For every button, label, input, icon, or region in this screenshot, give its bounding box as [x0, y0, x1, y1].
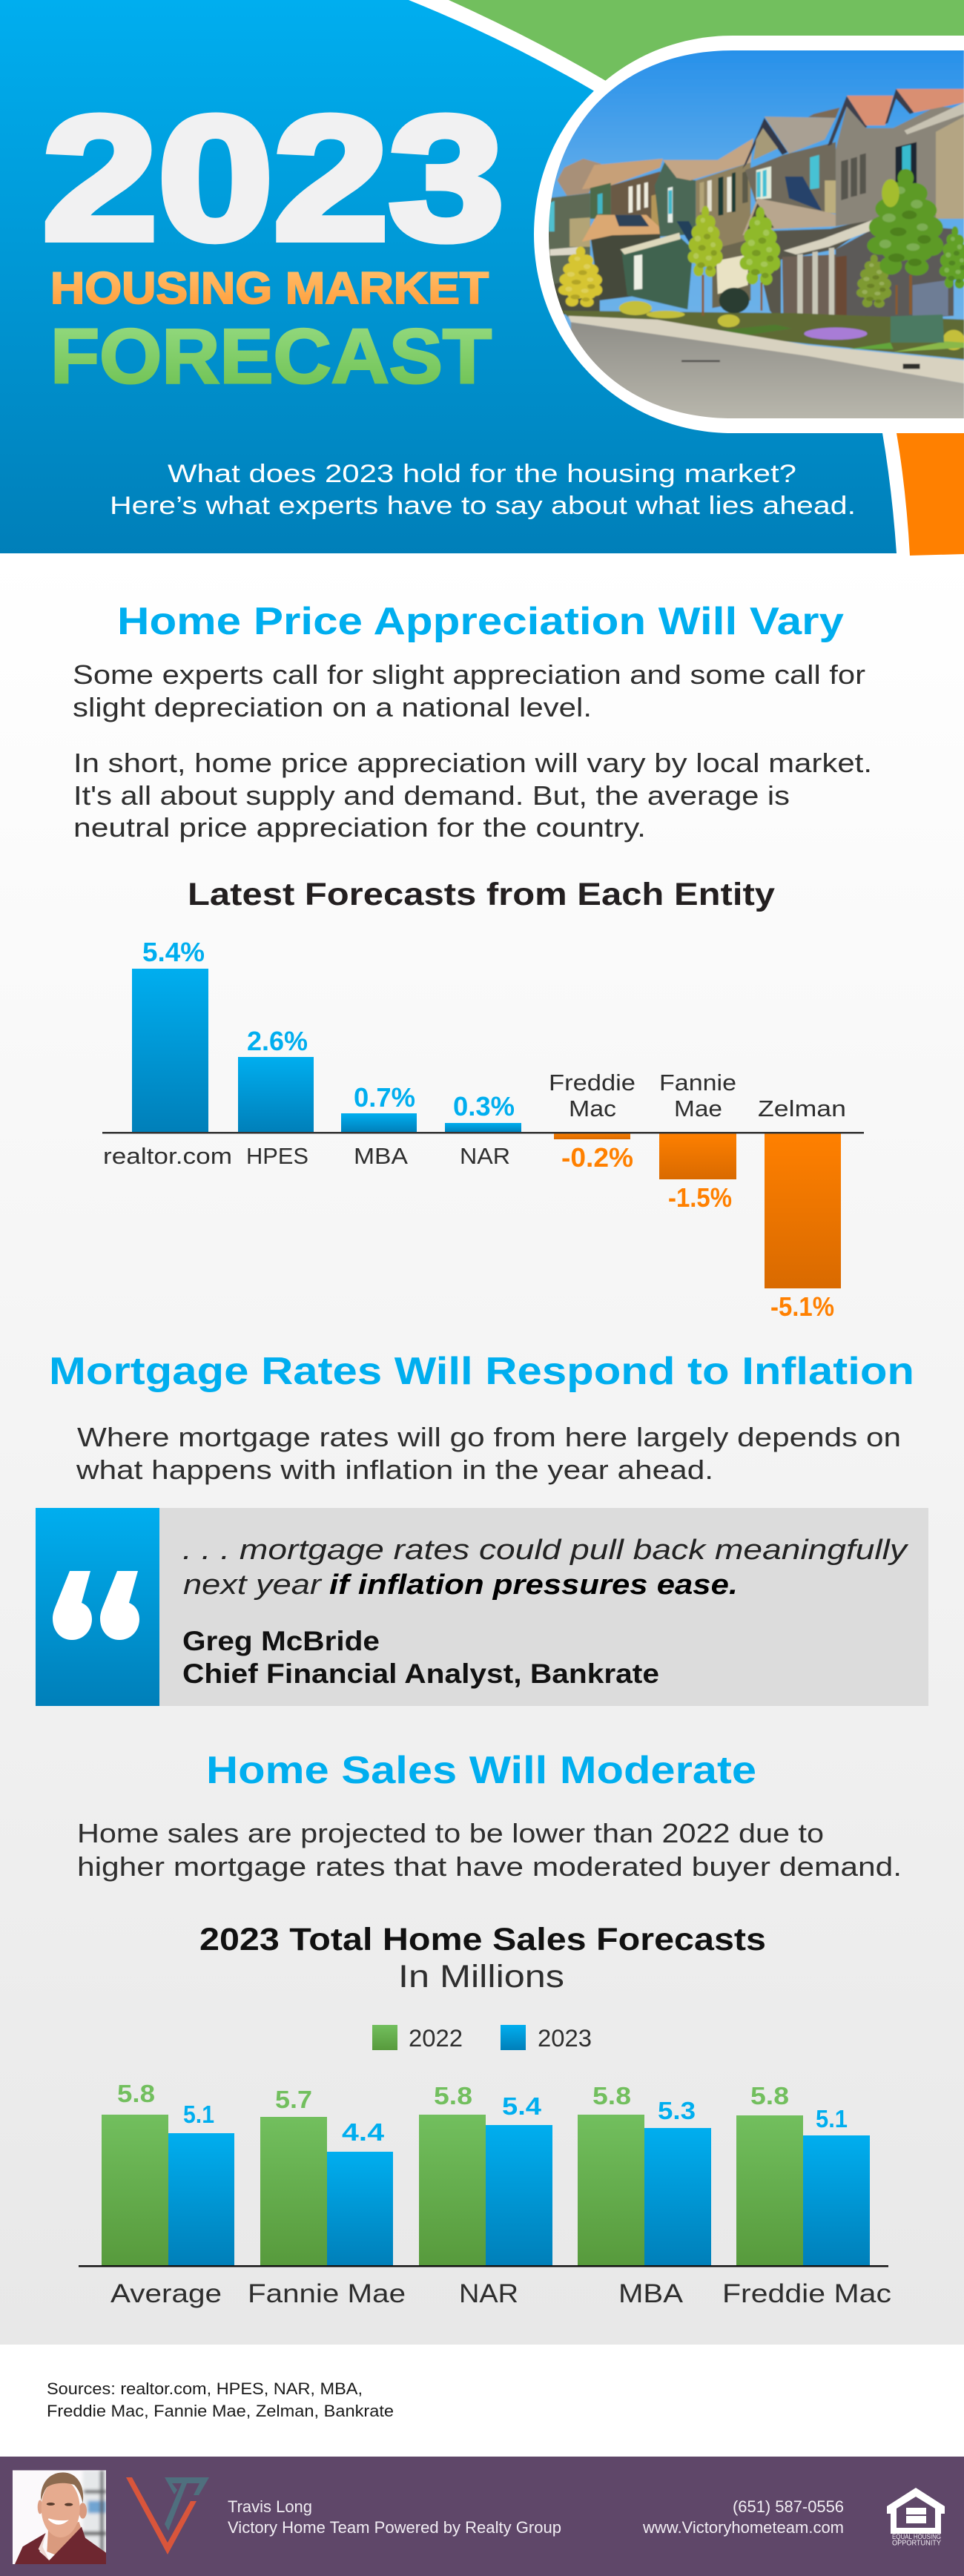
category labels: Mac: [569, 1096, 616, 1121]
category labels: [103, 1070, 846, 1169]
zero axis: [102, 1132, 864, 1133]
contact details: [642, 2497, 844, 2537]
chart subtitle: In Millions: [398, 1959, 564, 1994]
values: 2023: 5.1: [816, 2105, 848, 2132]
category labels: MBA: [354, 1143, 408, 1169]
values: 2023: 5.3: [658, 2097, 696, 2124]
bars: 2023: [168, 2125, 870, 2266]
section: mortgage rates: [49, 1350, 914, 1485]
agent name and company: Travis Long: [228, 2497, 312, 2516]
category labels: Average: [110, 2279, 222, 2308]
quote attribution: Greg McBride: [182, 1626, 380, 1656]
sources: [47, 2379, 394, 2420]
blue header shape: [0, 0, 897, 553]
legend: [372, 2025, 592, 2052]
quote text: if inflation pressures ease.: [329, 1569, 738, 1601]
chart title: Latest Forecasts from Each Entity: [188, 877, 775, 912]
value labels: -0.2%: [561, 1142, 633, 1173]
quote text: next year: [183, 1569, 323, 1601]
quote icon panel: [36, 1508, 159, 1706]
heading: Home Price Appreciation Will Vary: [117, 600, 844, 643]
category labels: HPES: [246, 1143, 308, 1169]
chart: 2023 total home sales forecasts: [79, 1922, 891, 2308]
footer background: [0, 2457, 964, 2576]
sources: Sources: realtor.com, HPES, NAR, MBA,: [47, 2379, 363, 2398]
legend: 2022: [409, 2025, 463, 2052]
paragraph 2: neutral price appreciation for the country.: [73, 812, 646, 843]
category labels: Mae: [674, 1096, 722, 1121]
paragraph: what happens with inflation in the year ahead.: [76, 1455, 713, 1485]
values: 2023: 5.4: [502, 2092, 542, 2120]
category labels: Fannie: [659, 1070, 736, 1096]
paragraph 1: slight depreciation on a national level.: [73, 692, 592, 722]
paragraph 1: Some experts call for slight appreciation and some call for: [73, 659, 865, 690]
values: 2022: 5.8: [750, 2082, 789, 2109]
icon: equal housing opportunity: EQUAL HOUSING: [892, 2533, 941, 2540]
category labels: realtor.com: [103, 1143, 232, 1169]
contact details: www.Victoryhometeam.com: [642, 2518, 844, 2537]
values: 2022: [117, 2080, 789, 2113]
values: 2022: 5.8: [434, 2082, 472, 2109]
values: 2023: 5.1: [183, 2101, 214, 2128]
value labels: [142, 937, 834, 1322]
white photo ring: [534, 36, 964, 433]
paragraph: higher mortgage rates that have moderated buyer demand.: [77, 1851, 902, 1882]
subtitle: Here’s what experts have to say about what lies ahead.: [110, 492, 856, 520]
quote attribution: Chief Financial Analyst, Bankrate: [182, 1658, 659, 1689]
sources: Freddie Mac, Fannie Mae, Zelman, Bankrate: [47, 2402, 394, 2420]
quote text: [182, 1535, 908, 1601]
subtitle: [110, 460, 856, 520]
value labels: -1.5%: [668, 1182, 732, 1213]
icon: equal housing opportunity: [887, 2488, 945, 2547]
panel: header: [0, 0, 964, 556]
agent name and company: Victory Home Team Powered by Realty Group: [228, 2518, 561, 2537]
green corner shape: [449, 0, 964, 223]
heading: Home Sales Will Moderate: [206, 1749, 756, 1792]
values: 2023: [183, 2092, 848, 2146]
chart: latest forecasts from each entity: [102, 877, 864, 1322]
paragraph: [76, 1422, 901, 1485]
quote background: [36, 1508, 928, 1706]
agent name and company: [228, 2497, 561, 2537]
bars: 2022: [102, 2115, 803, 2266]
paragraph: Home sales are projected to be lower than 2022 due to: [77, 1818, 824, 1848]
subtitle: What does 2023 hold for the housing market?: [168, 460, 796, 488]
callout: quote: [36, 1508, 928, 1706]
panel: body background: [0, 553, 964, 2345]
legend: 2023: [538, 2025, 592, 2052]
chart title: 2023 Total Home Sales Forecasts: [199, 1922, 766, 1957]
values: 2022: 5.7: [275, 2086, 312, 2113]
values: 2022: 5.8: [592, 2082, 631, 2109]
value labels: 2.6%: [247, 1026, 308, 1056]
heading: forecast: FORECAST: [50, 314, 492, 400]
paragraph 2: [73, 748, 872, 843]
value labels: -5.1%: [770, 1291, 834, 1322]
big year 2023: 2023: [42, 80, 504, 277]
agent photo: [13, 2470, 106, 2564]
photo: row of suburban houses: [549, 50, 964, 418]
section: home price appreciation: [73, 600, 872, 843]
panel: footer: [0, 2457, 964, 2576]
bars: negative forecasts: [554, 1133, 841, 1288]
category labels: Freddie Mac: [722, 2279, 891, 2308]
logo: victory V: [126, 2477, 209, 2554]
category labels: NAR: [459, 2279, 518, 2308]
section: home sales: [77, 1749, 902, 1882]
icon: quotation marks: [53, 1571, 139, 1640]
paragraph 1: [73, 659, 865, 722]
paragraph 2: It's all about supply and demand. But, the average is: [73, 780, 790, 811]
category labels: Fannie Mae: [248, 2279, 406, 2308]
bars: positive forecasts: [132, 969, 521, 1133]
heading: housing market: HOUSING MARKET: [50, 263, 489, 313]
orange corner shape: [897, 433, 964, 556]
paragraph: [77, 1818, 902, 1882]
values: 2023: 4.4: [342, 2118, 385, 2146]
category labels: MBA: [618, 2279, 684, 2308]
contact details: (651) 587-0556: [733, 2497, 844, 2516]
values: 2022: 5.8: [117, 2080, 155, 2107]
baseline axis: [79, 2265, 888, 2267]
quote text: . . . mortgage rates could pull back meaningfully: [182, 1535, 908, 1566]
value labels: 5.4%: [142, 937, 205, 967]
quote attribution: [182, 1626, 659, 1689]
value labels: 0.3%: [453, 1091, 515, 1121]
category labels: [110, 2279, 891, 2308]
category labels: Freddie: [549, 1070, 635, 1096]
heading: Mortgage Rates Will Respond to Inflation: [49, 1350, 914, 1393]
paragraph: Where mortgage rates will go from here largely depends on: [77, 1422, 901, 1452]
category labels: NAR: [460, 1143, 510, 1169]
icon: equal housing opportunity: OPPORTUNITY: [892, 2540, 941, 2547]
paragraph 2: In short, home price appreciation will vary by local market.: [73, 748, 872, 778]
value labels: 0.7%: [354, 1082, 415, 1113]
category labels: Zelman: [758, 1096, 846, 1121]
